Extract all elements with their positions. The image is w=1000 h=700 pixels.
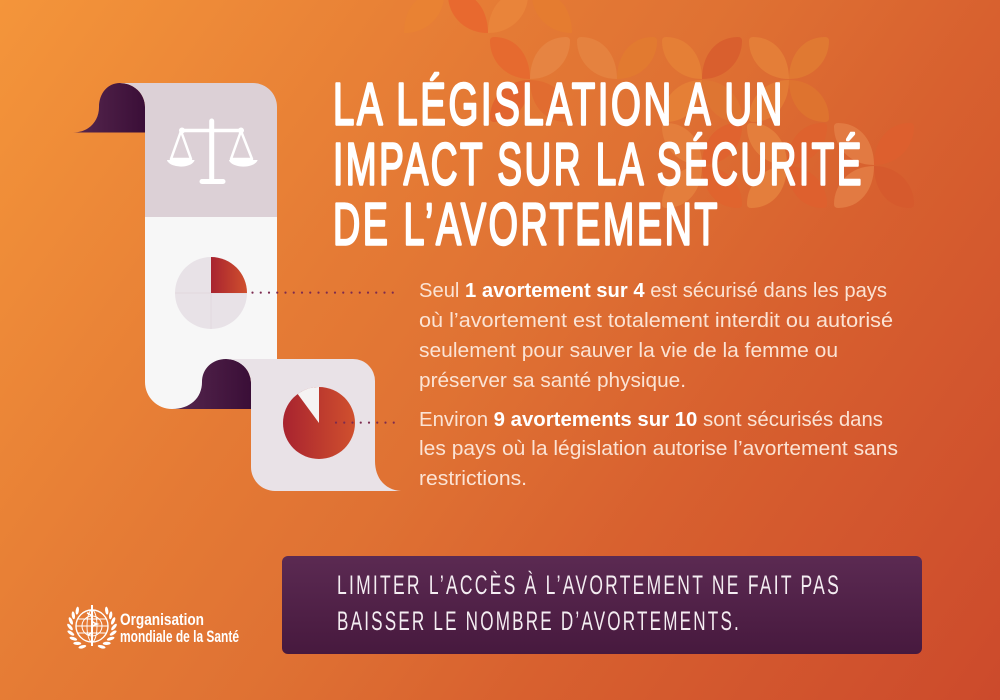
title xyxy=(333,72,864,258)
panel: lower scroll xyxy=(226,359,401,491)
callout: BAISSER LE NOMBRE D’AVORTEMENTS. xyxy=(337,606,741,636)
dotted connector 1 xyxy=(252,292,398,294)
organisation name: mondiale de la Santé xyxy=(120,627,239,646)
text block: 1 in 4: seulement pour sauver la vie de la femme ou xyxy=(419,340,838,362)
icon: scales of justice xyxy=(168,121,257,182)
text block: 1 in 4 xyxy=(419,280,893,392)
lower scroll curl xyxy=(172,359,251,409)
scroll top curl xyxy=(73,83,145,132)
title: DE L’AVORTEMENT xyxy=(333,192,720,258)
text block: 9 in 10: restrictions. xyxy=(419,468,527,490)
text block: 1 in 4: où l’avortement est totalement interdit ou autorisé xyxy=(419,310,893,332)
organisation name: Organisation xyxy=(120,610,204,629)
text block: 1 in 4: préserver sa santé physique. xyxy=(419,370,686,392)
dotted connector 2 xyxy=(336,422,398,424)
decorative leaf pattern xyxy=(404,0,914,208)
pie chart: 1 in 4 xyxy=(175,257,247,329)
icon: WHO emblem xyxy=(66,605,118,652)
logo: WHO xyxy=(66,605,239,652)
pie chart: 9 in 10 xyxy=(283,387,355,459)
text block: 9 in 10: les pays où la législation autorise l’avortement sans xyxy=(419,438,898,460)
text block: 9 in 10 xyxy=(419,409,898,490)
text block: 1 in 4: Seul 1 avortement sur 4 est sécurisé dans les pays xyxy=(419,280,887,302)
panel: white scroll body xyxy=(145,217,277,409)
organisation name xyxy=(120,610,239,646)
callout xyxy=(282,556,922,654)
scroll illustration xyxy=(73,83,401,491)
text block: 9 in 10: Environ 9 avortements sur 10 sont sécurisés dans xyxy=(419,409,883,431)
panel: scale background xyxy=(120,83,277,217)
